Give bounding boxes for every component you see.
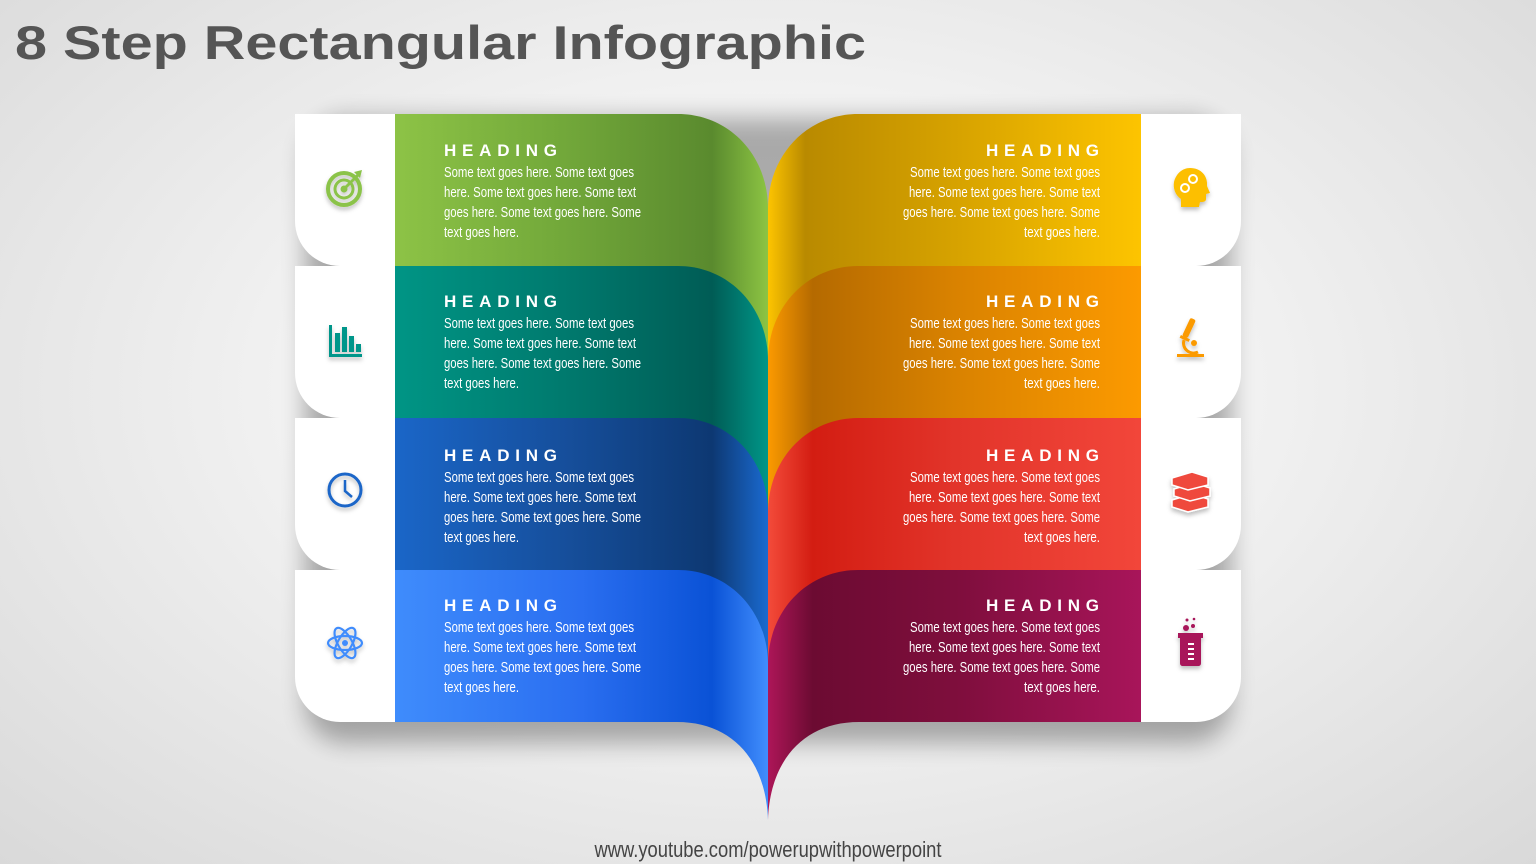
icon: atom <box>328 625 362 661</box>
text block: left 3: Some text goes here. Some text goes <box>444 469 634 486</box>
text block: right 4: HEADING <box>986 596 1099 615</box>
text block: right 1: Some text goes here. Some text goes <box>910 164 1100 181</box>
text block: right 2 <box>903 292 1101 392</box>
text block: right 1: here. Some text goes here. Some text <box>909 184 1101 201</box>
icon: beaker <box>1178 618 1203 666</box>
text block: left 2: Some text goes here. Some text goes <box>444 315 634 332</box>
text block: left 3: HEADING <box>444 446 557 465</box>
text block: right 3: HEADING <box>986 446 1099 465</box>
icon: clock <box>329 474 361 506</box>
panel: right colour bands <box>768 114 1141 820</box>
text block: right 3 <box>903 446 1101 546</box>
text block: left 2: HEADING <box>444 292 557 311</box>
text block: right 4 <box>903 596 1101 696</box>
text block: right 3: text goes here. <box>1024 529 1100 546</box>
panel: right white cards <box>1140 114 1241 722</box>
text block: left 3: goes here. Some text goes here. Some <box>444 509 641 526</box>
icon: target <box>328 170 362 205</box>
text block: right 2: HEADING <box>986 292 1099 311</box>
icon: head with gears <box>1174 168 1210 207</box>
text block: right 4: text goes here. <box>1024 679 1100 696</box>
shadow behind book <box>305 118 1231 743</box>
footer url: www.youtube.com/powerupwithpowerpoint <box>594 837 942 862</box>
text block: right 1: HEADING <box>986 141 1099 160</box>
text block: right 2: goes here. Some text goes here. Some <box>903 355 1100 372</box>
text block: left 3: here. Some text goes here. Some text <box>444 489 637 506</box>
text block: right 4: here. Some text goes here. Some text <box>909 639 1101 656</box>
text block: left 2 <box>444 292 641 392</box>
text block: right 1: text goes here. <box>1024 224 1100 241</box>
panel: left white cards <box>295 114 396 722</box>
text block: left 4: goes here. Some text goes here. Some <box>444 659 641 676</box>
text block: left 4: here. Some text goes here. Some text <box>444 639 637 656</box>
text block: right 2: text goes here. <box>1024 375 1100 392</box>
text block: right 3: here. Some text goes here. Some text <box>909 489 1101 506</box>
text block: right 1: goes here. Some text goes here. Some <box>903 204 1100 221</box>
text block: right 3: goes here. Some text goes here. Some <box>903 509 1100 526</box>
text block: left 4: Some text goes here. Some text goes <box>444 619 634 636</box>
text block: right 2: Some text goes here. Some text goes <box>910 315 1100 332</box>
text block: right 3: Some text goes here. Some text goes <box>910 469 1100 486</box>
text block: left 1: here. Some text goes here. Some text <box>444 184 637 201</box>
text block: left 4: text goes here. <box>444 679 519 696</box>
text block: left 1: Some text goes here. Some text goes <box>444 164 634 181</box>
text block: left 1: goes here. Some text goes here. Some <box>444 204 641 221</box>
text block: left 1: text goes here. <box>444 224 519 241</box>
icon: microscope <box>1177 318 1204 357</box>
text block: left 1: HEADING <box>444 141 557 160</box>
text block: left 3: text goes here. <box>444 529 519 546</box>
text block: left 2: goes here. Some text goes here. Some <box>444 355 641 372</box>
text block: right 4: Some text goes here. Some text goes <box>910 619 1100 636</box>
text block: left 2: text goes here. <box>444 375 519 392</box>
text block: left 1 <box>444 141 641 241</box>
text block: right 1 <box>903 141 1101 241</box>
text block: right 2: here. Some text goes here. Some text <box>909 335 1101 352</box>
text block: left 4 <box>444 596 641 696</box>
icon: books <box>1172 472 1210 512</box>
panel: left colour bands <box>395 114 768 820</box>
text block: left 4: HEADING <box>444 596 557 615</box>
text block: right 4: goes here. Some text goes here. Some <box>903 659 1100 676</box>
text block: left 3 <box>444 446 641 546</box>
icon: bar chart <box>329 325 362 357</box>
title: 8 Step Rectangular Infographic <box>15 16 866 69</box>
text block: left 2: here. Some text goes here. Some text <box>444 335 637 352</box>
